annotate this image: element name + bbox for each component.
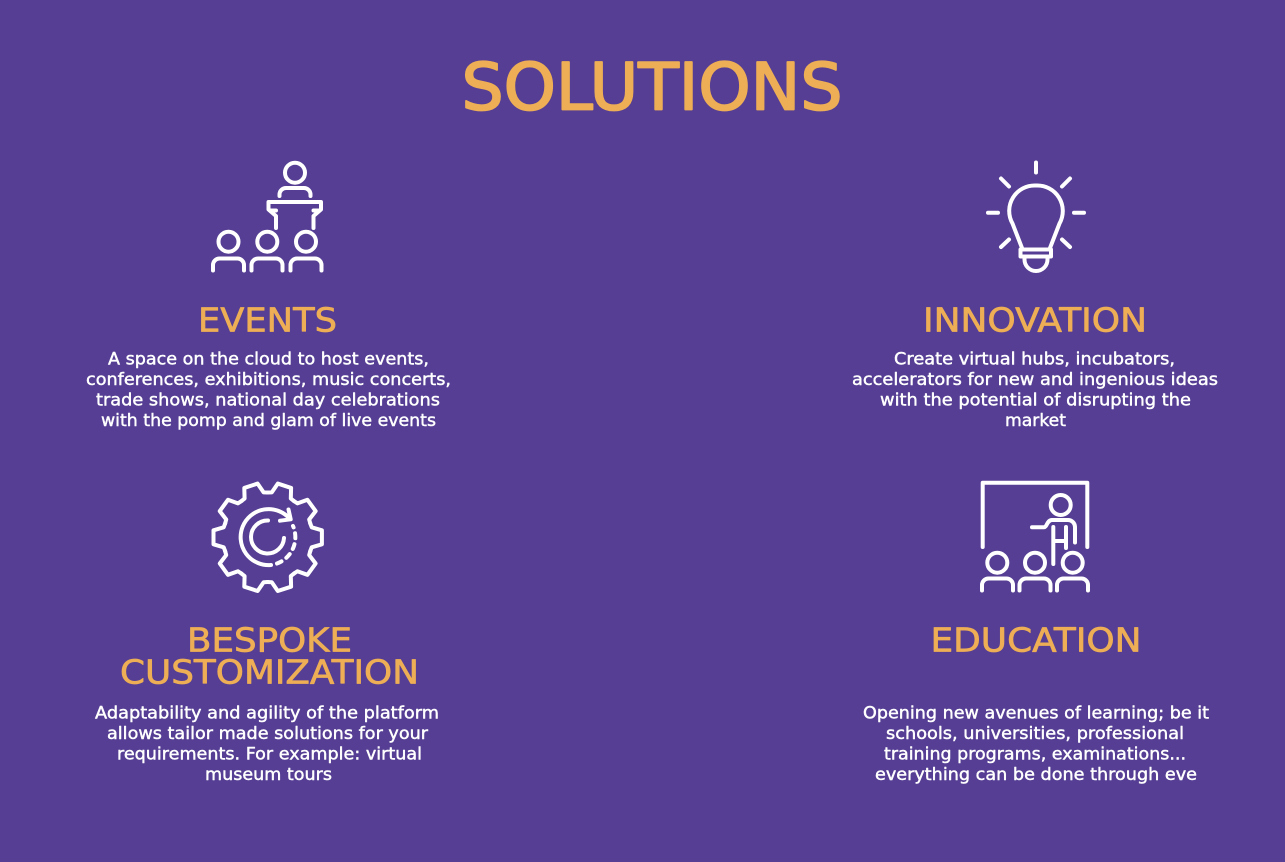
text block: innovation description: Create virtual hubs, incubators, [894,350,1175,370]
text block: innovation description: accelerators for new and ingenious ideas [852,370,1218,390]
text block: education description: everything can be done through eve [875,765,1197,785]
text block: customization description [95,704,439,785]
title: SOLUTIONS [462,50,842,126]
text block: events description: A space on the cloud to host events, [108,350,429,370]
heading: bespoke customization: BESPOKE [187,620,352,660]
panel: events [86,163,451,431]
text block: education description: Opening new avenues of learning; be it [863,704,1209,724]
text block: innovation description [852,350,1218,431]
text block: innovation description: market [1005,411,1066,431]
text block: customization description: Adaptability and agility of the platform [95,704,439,724]
text block: events description: conferences, exhibitions, music concerts, [86,370,451,390]
text block: customization description: museum tours [205,765,332,785]
panel: education [863,483,1209,785]
text block: events description [86,350,451,431]
panel: bespoke customization [95,481,439,785]
heading: education: EDUCATION [930,620,1142,660]
text block: education description [863,704,1209,785]
icon: light bulb [988,162,1084,271]
text block: innovation description: with the potential of disrupting the [880,390,1191,410]
icon: teacher at board with students [982,483,1088,590]
text block: customization description: allows tailor made solutions for your [107,724,428,744]
text block: education description: training programs, examinations... [884,744,1186,764]
panel: innovation [852,162,1218,431]
text block: events description: with the pomp and glam of live events [101,411,436,431]
icon: gear with rotation arrows [214,481,322,593]
heading: events: EVENTS [198,300,337,340]
heading: bespoke customization [120,620,419,692]
text block: customization description: requirements. For example: virtual [117,744,422,764]
heading: bespoke customization: CUSTOMIZATION [120,652,419,692]
icon: presenter and audience [213,163,322,270]
text block: events description: trade shows, national day celebrations [96,390,440,410]
heading: innovation: INNOVATION [923,300,1147,340]
text block: education description: schools, universities, professional [886,724,1184,744]
